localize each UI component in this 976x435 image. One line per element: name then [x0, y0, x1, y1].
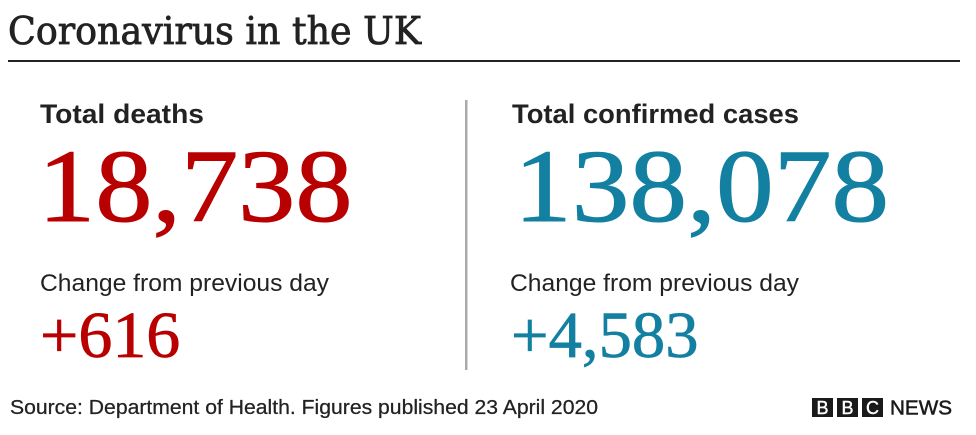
number: total cases: 138,078 [514, 128, 889, 244]
heading: total confirmed cases: Total confirmed cases [512, 99, 799, 129]
heading: total deaths: Total deaths [40, 99, 204, 129]
panel: total deaths [38, 99, 353, 372]
number: total deaths: 18,738 [38, 129, 353, 244]
logo: BBC News: B [841, 398, 854, 418]
title: Coronavirus in the UK [8, 9, 422, 53]
text: change label deaths: Change from previous day [40, 270, 329, 297]
logo: BBC News: B [816, 398, 829, 418]
divider [465, 100, 468, 370]
text: change label cases: Change from previous day [510, 270, 799, 297]
number: change in cases: +4,583 [511, 299, 699, 372]
number: change in deaths: +616 [40, 299, 180, 372]
panel: total confirmed cases [510, 99, 889, 372]
logo: BBC News: NEWS [890, 398, 952, 420]
logo: BBC News [812, 398, 952, 420]
source note: Source: Department of Health. Figures published 23 April 2020 [10, 397, 598, 419]
logo: BBC News: C [866, 398, 879, 418]
